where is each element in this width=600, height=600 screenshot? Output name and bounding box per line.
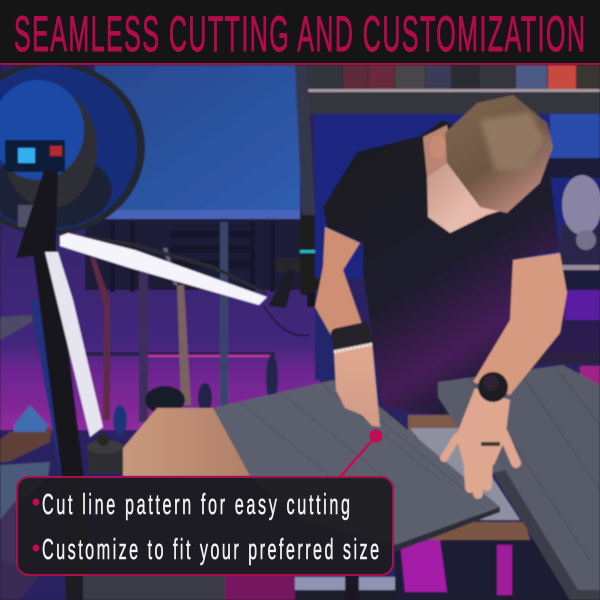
purple wall with guitars xyxy=(0,215,320,435)
acoustic foam panel, left xyxy=(213,380,500,552)
light stand pole xyxy=(33,250,84,478)
title: SEAMLESS CUTTING AND CUSTOMIZATION xyxy=(14,7,585,62)
white flexible boom arm xyxy=(45,233,267,473)
bullet: customize size: Customize to fit your preferred size xyxy=(42,533,379,565)
shelving unit with boxes xyxy=(295,65,600,388)
callout panel xyxy=(17,477,393,575)
callout leader line and dot xyxy=(340,430,382,477)
man's right arm, watch and hand xyxy=(444,253,567,494)
blue wall panel xyxy=(95,65,300,219)
desk wood top xyxy=(123,408,253,476)
bullet: cut line pattern: Cut line pattern for easy cutting xyxy=(42,488,350,520)
microphone xyxy=(264,210,324,336)
header band xyxy=(0,0,600,65)
microphone arm base xyxy=(87,434,123,473)
man's head and hair xyxy=(423,95,553,233)
man's left arm with bracelets and pointing hand xyxy=(315,227,380,427)
shelves at left xyxy=(0,300,68,600)
cutting mat xyxy=(410,428,520,520)
area below desk xyxy=(83,540,573,600)
man's torso in black t-shirt xyxy=(323,120,560,415)
acoustic foam panel, right xyxy=(438,365,600,600)
toy robot figure on shelf xyxy=(560,175,600,265)
ring light xyxy=(0,61,145,258)
